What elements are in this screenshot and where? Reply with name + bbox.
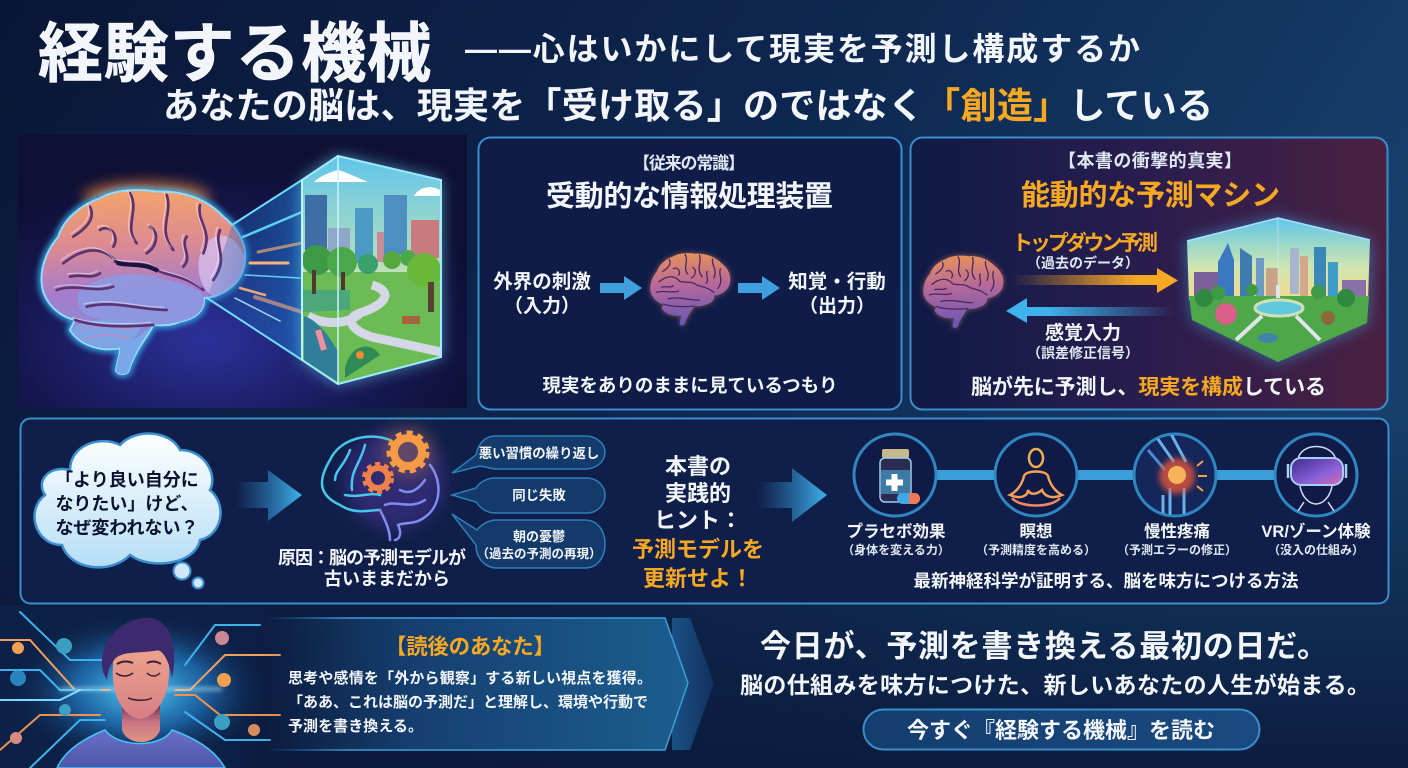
sensory label: 感覚入力 (1045, 321, 1121, 344)
head (113, 646, 169, 719)
icon: meditation (995, 434, 1077, 516)
panel: the book's truth (910, 138, 1388, 410)
panel heading: 【読後のあなた】 (385, 635, 555, 659)
item labels: （予測精度を高める） (976, 542, 1096, 557)
hint: 本書の (665, 454, 731, 479)
output label: 知覚・行動 (788, 271, 886, 293)
body text: 予測を書き換える。 (288, 717, 423, 735)
body text: 思考や感情を「外から観察」する新しい視点を獲得。 (288, 669, 652, 687)
conclusion: 脳が先に予測し、現実を構成している (971, 375, 1326, 399)
subtitle: ――心はいかにして現実を予測し構成するか (465, 31, 1140, 67)
closing message: 今日が、予測を書き換える最初の日だ。 (760, 629, 1328, 664)
bench (402, 316, 420, 324)
caption: 現実をありのままに見ているつもり (542, 375, 838, 396)
top-down label: （過去のデータ） (1027, 255, 1139, 271)
hint: 予測モデルを (632, 537, 764, 562)
symptom bubble: 同じ失敗 (512, 487, 566, 503)
output label (788, 271, 886, 317)
symptom bubble (452, 514, 605, 568)
icon: VR headset (1275, 434, 1357, 516)
connector (930, 470, 1290, 480)
arrow (600, 276, 642, 300)
park (1189, 296, 1369, 362)
item labels: （没入の仕組み） (1268, 542, 1364, 557)
thought cloud (34, 434, 221, 588)
closing message: 脳の仕組みを味方につけた、新しいあなたの人生が始まる。 (740, 672, 1370, 698)
body text: 「ああ、これは脳の予測だ」と理解し、環境や行動で (288, 693, 648, 711)
icon: medicine bottle (854, 434, 936, 516)
cause (278, 547, 466, 589)
hair (102, 618, 174, 680)
hero illustration: brain projecting reality (18, 135, 467, 408)
body text (288, 669, 652, 735)
arrow: prediction (1012, 268, 1178, 293)
clouds (314, 170, 368, 182)
panel heading: 能動的な予測マシン (1021, 179, 1280, 212)
symptom bubble: 朝の憂鬱 (513, 529, 565, 544)
item labels: （予測エラーの修正） (1117, 542, 1237, 557)
arrow: sensory input (1006, 298, 1173, 323)
input label (493, 271, 591, 317)
top-down label: トップダウン予測 (1012, 231, 1158, 255)
cause: 原因：脳の予測モデルが (278, 547, 466, 568)
symptom bubble: （過去の予測の再現） (476, 546, 602, 561)
beam rays (235, 212, 302, 321)
button: 今すぐ『経験する機械』を読む (907, 718, 1215, 743)
circuit lines (0, 612, 280, 768)
hint: 更新せよ！ (643, 566, 753, 591)
icon: brain with gears (322, 426, 445, 540)
output label: （出力） (799, 295, 875, 317)
city buildings (305, 195, 327, 250)
portrait: person with circuits (0, 605, 290, 768)
caption: 最新神経科学が証明する、脳を味方につける方法 (914, 571, 1299, 591)
city cube (1187, 218, 1370, 362)
headline: あなたの脳は、現実を「受け取る」のではなく「創造」している (163, 85, 1213, 126)
item labels: 瞑想 (1020, 522, 1053, 541)
arrow (738, 276, 780, 300)
thought cloud: 「より良い自分に (55, 470, 199, 490)
item labels: プラセボ効果 (846, 522, 946, 541)
icon: brain (650, 253, 730, 325)
button (864, 710, 1260, 750)
arrow (758, 468, 827, 522)
panel: conventional view (478, 138, 902, 410)
item labels: VR/ゾーン体験 (1261, 522, 1371, 541)
icon: knee (1134, 432, 1216, 520)
symptom bubble: 悪い習慣の繰り返し (479, 445, 599, 461)
top-down label (1012, 231, 1158, 271)
trees (302, 245, 332, 275)
shoulders (57, 730, 225, 768)
thought cloud: なぜ変われない？ (55, 518, 199, 538)
hint: 実践的 (665, 481, 731, 506)
icon: brain (923, 256, 1003, 328)
arrow (236, 470, 302, 521)
projection beam (207, 180, 302, 360)
sensory label (1027, 321, 1139, 361)
neck (122, 705, 160, 742)
hint (632, 454, 764, 591)
item labels: （身体を変える力） (842, 542, 950, 557)
title: 経験する機械 (38, 17, 432, 90)
panel label: 【従来の常識】 (633, 154, 745, 173)
input label: （入力） (504, 295, 580, 317)
input label: 外界の刺激 (493, 271, 591, 293)
icon: glowing brain (41, 182, 245, 374)
symptom bubble (452, 436, 605, 473)
thought cloud: なりたい」けど、 (55, 494, 199, 514)
panel heading: 受動的な情報処理装置 (546, 180, 833, 213)
park lawn (302, 272, 441, 384)
panel: after reading (265, 618, 714, 750)
item labels (842, 521, 1371, 557)
reality cube (302, 156, 441, 384)
foliage (304, 316, 338, 382)
buildings (1194, 272, 1220, 306)
item labels: 慢性疼痛 (1144, 521, 1210, 541)
panel label: 【本書の衝撃的真実】 (1058, 150, 1242, 171)
closing message (740, 629, 1370, 698)
symptom bubble (452, 478, 605, 513)
road (308, 285, 441, 352)
hint: ヒント： (654, 508, 742, 533)
eyes and mouth (116, 673, 160, 700)
sensory label: （誤差修正信号） (1027, 345, 1139, 361)
panel: problem and hints (20, 418, 1388, 604)
cause: 古いままだから (324, 569, 450, 589)
